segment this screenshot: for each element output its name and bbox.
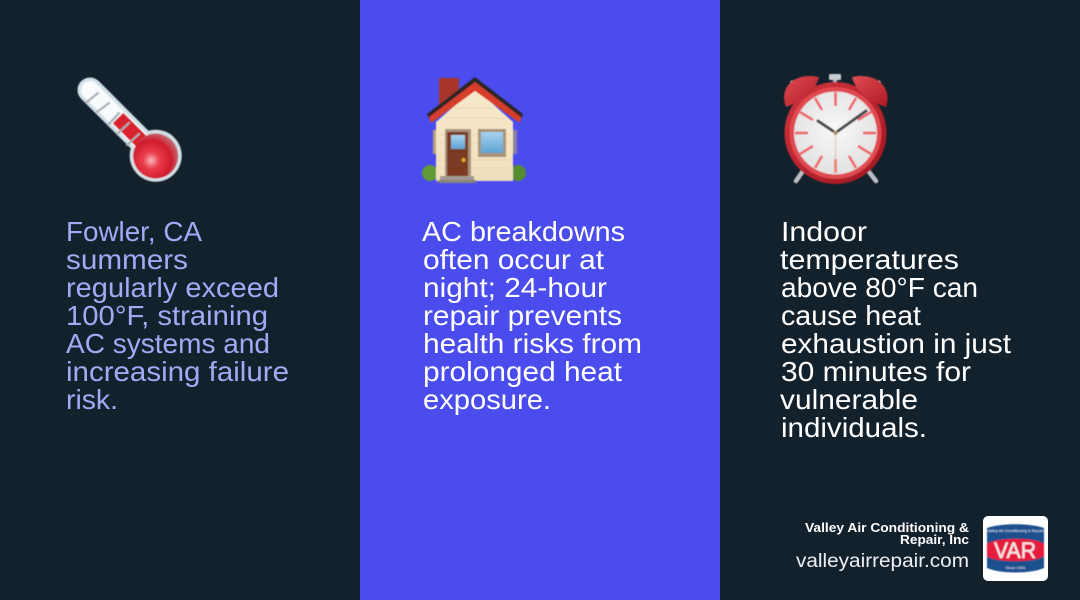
website url: valleyairrepair.com xyxy=(796,551,969,572)
icon: thermometer xyxy=(87,90,182,182)
logo badge xyxy=(983,516,1048,581)
logo badge: VAR xyxy=(994,538,1036,563)
company name xyxy=(805,520,969,547)
panel: right background xyxy=(720,0,1080,600)
text block: left fact: regularly exceed xyxy=(66,272,279,303)
company name: Repair, Inc xyxy=(900,532,969,547)
text block: center fact: AC breakdowns xyxy=(422,216,625,247)
text block: center fact: health risks from xyxy=(423,328,642,359)
text block: left fact: Fowler, CA xyxy=(66,216,202,247)
company name: Valley Air Conditioning & xyxy=(805,520,969,535)
text block: left fact: summers xyxy=(66,244,188,275)
text block: right fact: vulnerable xyxy=(780,384,918,415)
panel: left background xyxy=(0,0,360,600)
text block: right fact: temperatures xyxy=(780,244,959,275)
text block: left fact: risk. xyxy=(66,384,118,415)
text block: right fact: 30 minutes for xyxy=(781,356,971,387)
text block: left fact: AC systems and xyxy=(66,328,270,359)
text block: right fact: individuals. xyxy=(781,412,927,443)
logo badge: Since 1991 xyxy=(1005,565,1026,570)
text block: left fact: 100°F, straining xyxy=(66,300,268,331)
text block: center fact: often occur at xyxy=(423,244,604,275)
text block: right fact: above 80°F can xyxy=(781,272,978,303)
text block: center fact: repair prevents xyxy=(423,300,622,331)
text block: right fact: exhaustion in just xyxy=(781,328,1011,359)
text block: left fact xyxy=(66,216,289,415)
panel: center background xyxy=(360,0,720,600)
text block: right fact: cause heat xyxy=(781,300,921,331)
text block: right fact: Indoor xyxy=(781,216,867,247)
text block: center fact xyxy=(422,216,642,415)
text block: center fact: night; 24-hour xyxy=(423,272,607,303)
logo badge: Valley Air Conditioning & Repair xyxy=(987,528,1044,533)
text block: left fact: increasing failure xyxy=(66,356,289,387)
text block: right fact xyxy=(780,216,1011,443)
text block: center fact: exposure. xyxy=(423,384,551,415)
text block: center fact: prolonged heat xyxy=(423,356,622,387)
icon: alarm clock xyxy=(784,74,888,184)
icon: house xyxy=(422,77,526,183)
